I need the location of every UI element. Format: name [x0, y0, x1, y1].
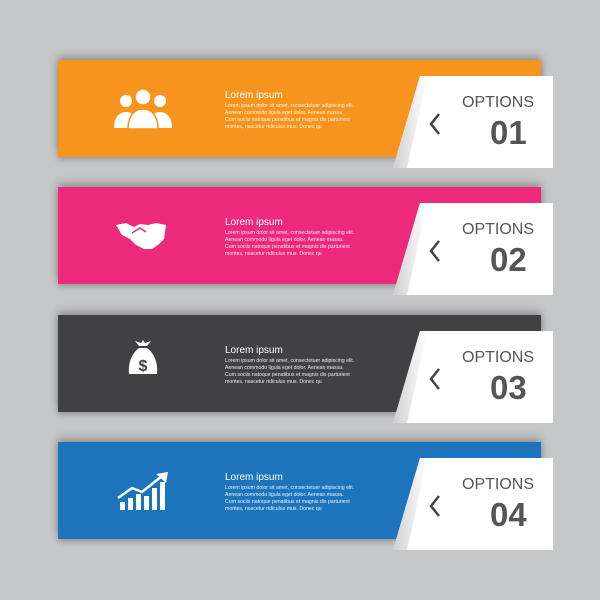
panel: option 02: 02 — [490, 241, 527, 278]
banner orange — [58, 60, 541, 157]
panel: option 02: OPTIONS — [462, 221, 534, 238]
panel: option 02 — [53, 179, 553, 295]
chevron — [430, 113, 440, 135]
panel: option 01: 01 — [490, 114, 527, 151]
panel: option 03: 03 — [490, 369, 527, 406]
panel: option 01 — [53, 52, 553, 168]
icon: handshake — [116, 223, 166, 249]
panel: option 03: Lorem ipsum dolor sit amet, consectetuer adipiscing elit. Aenean commodo ligula eget dolor. Aenean massa. Cum sociis natoque penatibus et magnis dis parturient montes, nascetur ridiculus mus. Donec qu — [225, 358, 354, 385]
white card — [393, 76, 553, 168]
icon: growth chart — [117, 472, 168, 510]
text block: Lorem ipsum — [225, 90, 283, 101]
panel: option 03 — [53, 307, 553, 423]
panel: option 04 — [53, 434, 553, 550]
icon: people — [114, 90, 172, 128]
icon: money bag — [128, 340, 158, 375]
panel: option 04: OPTIONS — [462, 476, 534, 493]
chevron — [430, 368, 440, 390]
banner blue — [58, 442, 541, 539]
panel: option 04: Lorem ipsum — [225, 472, 283, 483]
panel: option 01: Lorem ipsum dolor sit amet, consectetuer adipiscing elit. Aenean commodo ligula eget dolor. Aenean massa. Cum sociis natoque penatibus et magnis dis parturient montes, nascetur ridiculus mus. Donec qu — [225, 103, 354, 130]
chevron — [430, 240, 440, 262]
panel: option 01: OPTIONS — [462, 94, 534, 111]
panel: option 02: Lorem ipsum — [225, 217, 283, 228]
icon: money bag: $ — [139, 358, 148, 375]
panel: option 02: Lorem ipsum dolor sit amet, consectetuer adipiscing elit. Aenean commodo ligula eget dolor. Aenean massa. Cum sociis natoque penatibus et magnis dis parturient montes, nascetur ridiculus mus. Donec qu — [225, 230, 354, 257]
panel: option 03: OPTIONS — [462, 349, 534, 366]
banner pink — [58, 187, 541, 284]
panel: option 03: Lorem ipsum — [225, 345, 283, 356]
chevron — [430, 495, 440, 517]
panel: option 04: Lorem ipsum dolor sit amet, consectetuer adipiscing elit. Aenean commodo ligula eget dolor. Aenean massa. Cum sociis natoque penatibus et magnis dis parturient montes, nascetur ridiculus mus. Donec qu — [225, 485, 354, 512]
panel: option 04: 04 — [490, 496, 527, 533]
banner dark — [58, 315, 541, 412]
